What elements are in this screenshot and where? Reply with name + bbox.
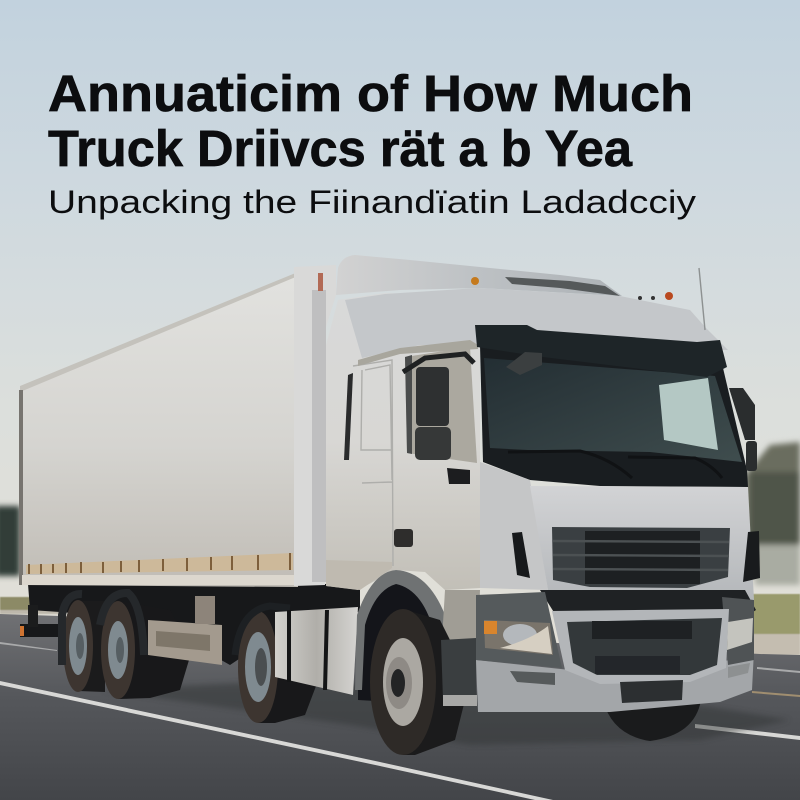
upper door shoulder (358, 340, 478, 366)
lower dark intake (540, 590, 756, 622)
front panel (530, 486, 754, 600)
headlight housing (476, 592, 562, 668)
right intake (743, 531, 760, 582)
right side mirror (729, 388, 757, 471)
cab side body (326, 293, 480, 590)
trailer rear post (19, 390, 23, 585)
far front tyre (603, 700, 701, 741)
door window (405, 347, 477, 463)
tandem mudguards (62, 593, 144, 665)
headlight left (484, 620, 553, 655)
side vent (344, 373, 353, 460)
fog lamp left (510, 671, 555, 685)
background trees left (0, 506, 20, 576)
tandem wheel front (101, 601, 192, 699)
left mirror arms (403, 354, 474, 372)
chassis (28, 584, 360, 665)
trailer bottom rail with orange strip (22, 553, 294, 585)
subtitle: Unpacking the Fiinandïatin Ladadcciy (48, 184, 696, 220)
windshield frame band (480, 345, 748, 487)
upper grille (552, 527, 730, 588)
rear bumper bar (20, 605, 58, 637)
front wheel (370, 609, 470, 755)
side window dark edge (405, 355, 412, 454)
roof deflector (336, 255, 622, 296)
fuel tank (275, 607, 358, 695)
sun visor (475, 325, 727, 377)
trailer top rail (20, 272, 298, 392)
fender (355, 570, 446, 690)
drive wheel (235, 606, 324, 723)
windshield reflection (659, 378, 718, 450)
side skirt (148, 596, 222, 665)
mirror lower bracket (447, 468, 470, 484)
tandem wheel rear (63, 600, 105, 692)
door handle (394, 529, 413, 547)
roof vent (505, 277, 620, 296)
rear door outline (353, 360, 393, 566)
cab A-pillar panel (480, 462, 548, 590)
windshield glass (484, 358, 742, 462)
title (48, 65, 693, 177)
truck (19, 255, 760, 755)
left mirror lower (415, 427, 451, 460)
number plate holder (620, 680, 683, 703)
cab roof (345, 288, 728, 358)
marker lights (471, 277, 673, 300)
step panel (441, 638, 476, 705)
right light housing (722, 597, 754, 665)
road markings (0, 642, 800, 800)
road (0, 614, 800, 800)
background trees and fence right (745, 442, 800, 585)
title: Truck Driivcs rät a b Yea (48, 120, 633, 177)
wheel arch opening (358, 582, 447, 705)
bumper centre frame (552, 609, 729, 684)
trailer side (20, 273, 298, 587)
trailer front corner panel (294, 265, 336, 586)
side intake vent (512, 532, 530, 578)
headlight right (727, 618, 753, 650)
wipers (508, 451, 722, 478)
fog lamp right (728, 663, 750, 678)
cab lower panel (326, 560, 392, 590)
title: Annuaticim of How Much (48, 65, 693, 122)
lower grille (567, 618, 722, 675)
bumper (476, 650, 754, 712)
lower side panel (442, 590, 480, 640)
grass and sidewalk (0, 594, 800, 655)
step (443, 695, 477, 706)
antenna (699, 268, 705, 330)
truck shadow on road (100, 680, 790, 745)
left mirror upper (416, 367, 449, 426)
interior mirror (506, 352, 542, 375)
